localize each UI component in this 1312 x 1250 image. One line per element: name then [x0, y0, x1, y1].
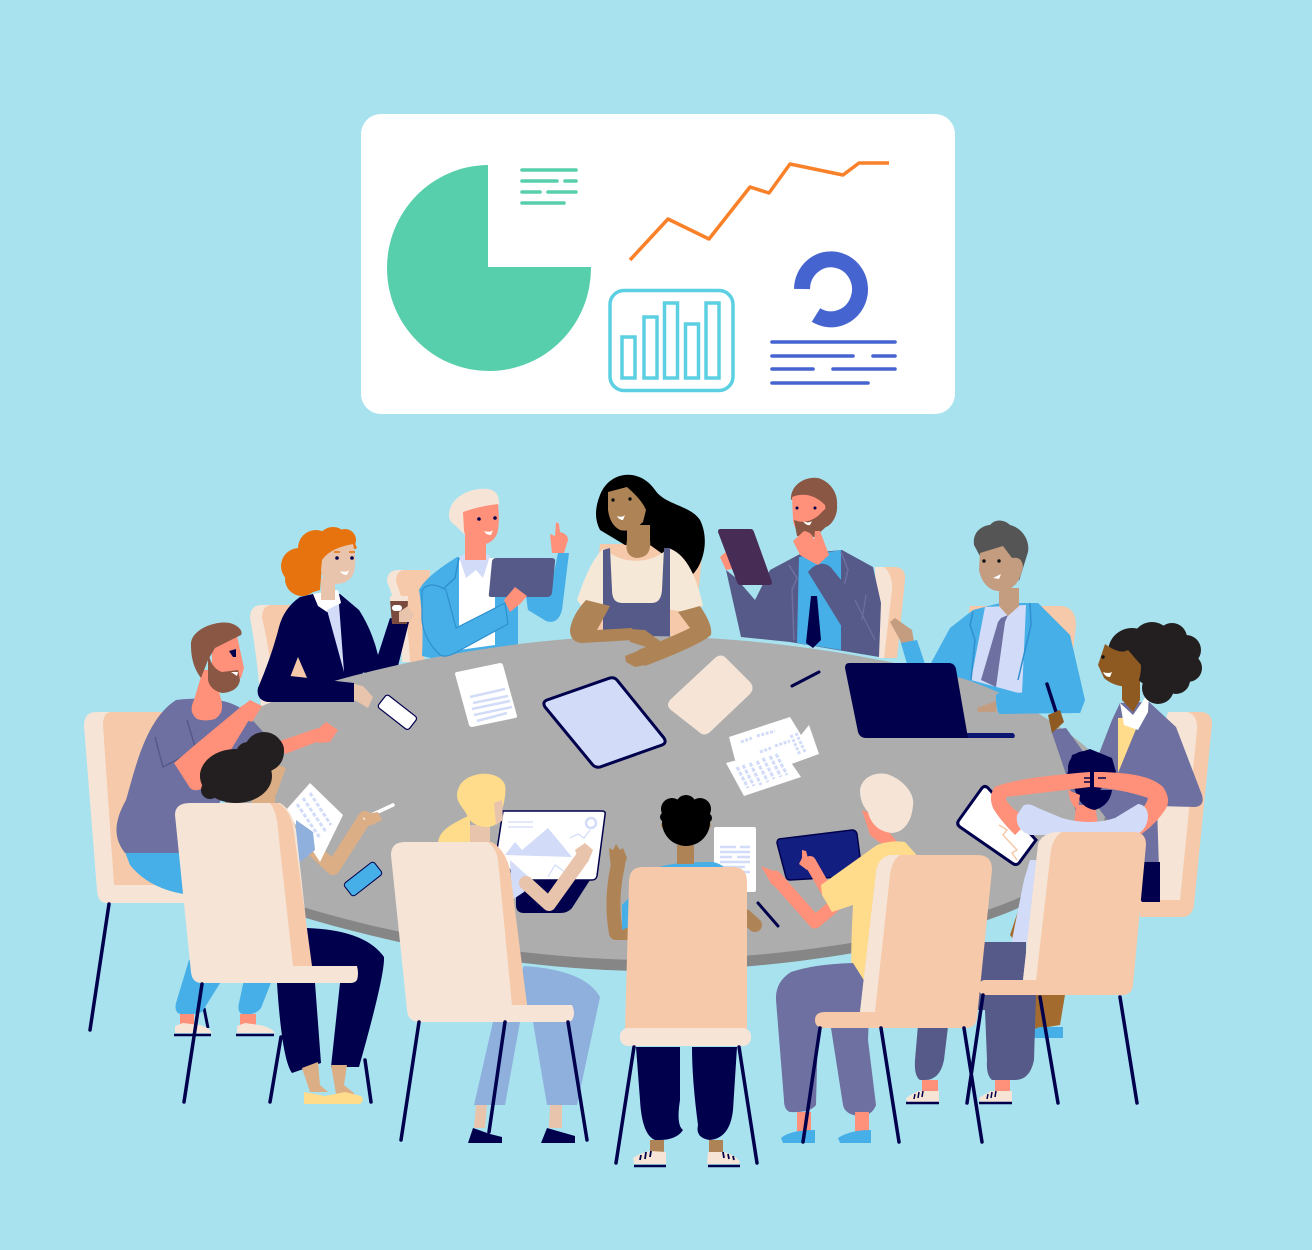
- white-haired man tablet: [489, 558, 555, 597]
- laptop: [845, 663, 1015, 738]
- ankles: [180, 1014, 256, 1025]
- other arm: [745, 916, 755, 925]
- screen tablet back: [516, 880, 590, 913]
- person: woman with curly hair on right: [1047, 622, 1212, 917]
- orange-haired woman hand: [354, 684, 373, 708]
- extended hand: [316, 722, 338, 743]
- shoes: [304, 1092, 363, 1104]
- ankles: [922, 1080, 1010, 1092]
- chart tablet: [958, 786, 1036, 864]
- chair: [175, 803, 371, 1102]
- document: [455, 663, 517, 727]
- shoes: [633, 1151, 740, 1166]
- overalls: [603, 548, 670, 640]
- face: [212, 636, 244, 678]
- table top: [225, 636, 1109, 960]
- shirt sleeve: [296, 820, 315, 862]
- person: woman with dark hair, rear view: [175, 732, 393, 1104]
- woman center left arm: [570, 600, 634, 643]
- pie chart: [387, 165, 591, 371]
- hair: [281, 527, 357, 596]
- arms behind head: [991, 772, 1168, 835]
- woman center right arm: [638, 606, 711, 666]
- hand on chin: [793, 531, 829, 565]
- pen: [792, 672, 819, 686]
- hand: [575, 843, 593, 863]
- chair: [616, 867, 757, 1163]
- shoes: [468, 1128, 575, 1143]
- trousers: [636, 1047, 737, 1140]
- pen: [365, 805, 393, 818]
- ankles: [797, 1112, 869, 1132]
- trousers: [474, 966, 600, 1105]
- brown legs of woman behind: [1010, 905, 1065, 1030]
- paper stack: [726, 717, 819, 796]
- shoe right: [979, 1091, 1012, 1103]
- hair: [860, 774, 913, 833]
- sleeve seam: [155, 720, 196, 767]
- pie legend text lines: [522, 170, 576, 203]
- table: [225, 636, 1109, 971]
- line chart: [630, 163, 889, 260]
- hair: [200, 732, 284, 803]
- cream t-shirt: [577, 548, 703, 612]
- beige folder: [668, 656, 752, 734]
- hair: [974, 520, 1028, 581]
- person: blonde woman, rear view: [391, 774, 605, 1143]
- hand: [1048, 710, 1064, 733]
- hair: [449, 489, 499, 540]
- person: orange-haired woman sleeve: [258, 650, 354, 702]
- panel: presentation board: [361, 114, 955, 414]
- chair: front right: [967, 832, 1146, 1103]
- beard: [208, 650, 240, 693]
- blue shoe: [1025, 1027, 1063, 1038]
- raised hand: [240, 700, 262, 722]
- person: bearded man with purple tablet, torso: [718, 478, 881, 657]
- hair: [191, 622, 242, 678]
- hair: [457, 774, 505, 827]
- coffee hand: [399, 606, 414, 622]
- table edge: [225, 646, 1109, 971]
- table items: [343, 656, 1036, 926]
- lavender tablet: [544, 678, 665, 767]
- extended arm: [280, 728, 322, 754]
- shirt top: [1017, 804, 1148, 835]
- arm: [775, 877, 835, 922]
- torso: [1085, 702, 1203, 900]
- papers: [286, 783, 343, 862]
- hair ponytail: [438, 815, 470, 842]
- dark tablet: [777, 830, 862, 880]
- person: white-haired man, torso: [419, 489, 569, 660]
- shirt: [821, 841, 930, 985]
- shoe left: [174, 1023, 212, 1035]
- standing document: [714, 827, 756, 892]
- screen tablet: [497, 811, 605, 880]
- person: woman with long black hair, torso: [577, 475, 705, 640]
- raised arm: [613, 865, 628, 933]
- neck: [192, 670, 222, 720]
- bar chart: [610, 290, 733, 390]
- tablet arm hand: [720, 550, 736, 570]
- chair: [84, 712, 190, 1030]
- hair: [660, 795, 712, 846]
- person: boy, rear view: [609, 795, 757, 1166]
- donut legend text lines: [772, 342, 895, 383]
- neck: [252, 790, 275, 805]
- shirt: [510, 860, 532, 900]
- pen near boy: [758, 903, 778, 926]
- chair: [1140, 712, 1212, 917]
- chair: [391, 842, 587, 1140]
- raised hand: [550, 522, 568, 553]
- arm: [312, 818, 365, 868]
- woman center left hand: [630, 629, 660, 648]
- arm: [1051, 728, 1092, 830]
- neck: [1122, 680, 1140, 712]
- shirt: [116, 699, 266, 853]
- person: man in yellow shirt, rear view: [761, 774, 992, 1143]
- head: [1067, 749, 1116, 810]
- shirt: [622, 862, 735, 930]
- person: grey-haired man, torso: [890, 520, 1085, 713]
- hair: [791, 478, 837, 527]
- face: [792, 495, 827, 535]
- raised arm: [174, 705, 252, 790]
- trousers: [776, 963, 876, 1116]
- lavender shirt lower: [1011, 860, 1050, 945]
- face: [979, 546, 1023, 591]
- hair: [1108, 622, 1202, 704]
- ear: [494, 800, 503, 825]
- donut chart: [802, 259, 860, 319]
- hand fingers: [1084, 778, 1106, 782]
- hand: [761, 866, 781, 885]
- raised arm: [525, 553, 569, 622]
- person: man with hands behind head, rear view: [906, 749, 1168, 1103]
- hand: [362, 812, 382, 826]
- purple tablet: [718, 529, 772, 585]
- ankles: [474, 1105, 562, 1128]
- ankles: [302, 1062, 355, 1094]
- thigh: [125, 852, 190, 895]
- shoe left: [906, 1091, 939, 1103]
- hand and forearm up: [810, 862, 826, 890]
- arm: [526, 858, 582, 904]
- white phone: [377, 694, 418, 731]
- face: [321, 544, 355, 584]
- neck: [1074, 805, 1098, 825]
- beard: [794, 508, 828, 537]
- pen: [1047, 684, 1056, 712]
- lower legs: [176, 960, 274, 1014]
- coffee cup: [390, 596, 408, 624]
- chair: [803, 855, 992, 1142]
- grey-haired man hand and sleeve: [977, 692, 1085, 714]
- raised hand: [609, 844, 627, 872]
- raised arm: [808, 564, 877, 650]
- person: bearded man on left: [84, 622, 338, 1035]
- neck: [470, 825, 490, 845]
- blue phone: [343, 861, 383, 897]
- shoes: [781, 1130, 871, 1143]
- white-haired man forearm: [422, 585, 508, 656]
- shoe right: [236, 1023, 275, 1035]
- white-haired man hand: [504, 587, 527, 612]
- neck: [677, 845, 694, 864]
- ankles: [650, 1140, 723, 1153]
- arms on the table: [354, 558, 1085, 714]
- back chairs: [250, 544, 1076, 720]
- far chair leg: [204, 1008, 208, 1028]
- person: orange-haired woman, torso: [258, 527, 409, 702]
- trousers: [277, 928, 384, 1073]
- face: [1098, 644, 1141, 687]
- hand and sleeve: [890, 618, 925, 668]
- woman center right hand: [625, 650, 652, 667]
- neck: [862, 810, 898, 843]
- back trousers: [915, 942, 1036, 1080]
- face: [463, 504, 499, 545]
